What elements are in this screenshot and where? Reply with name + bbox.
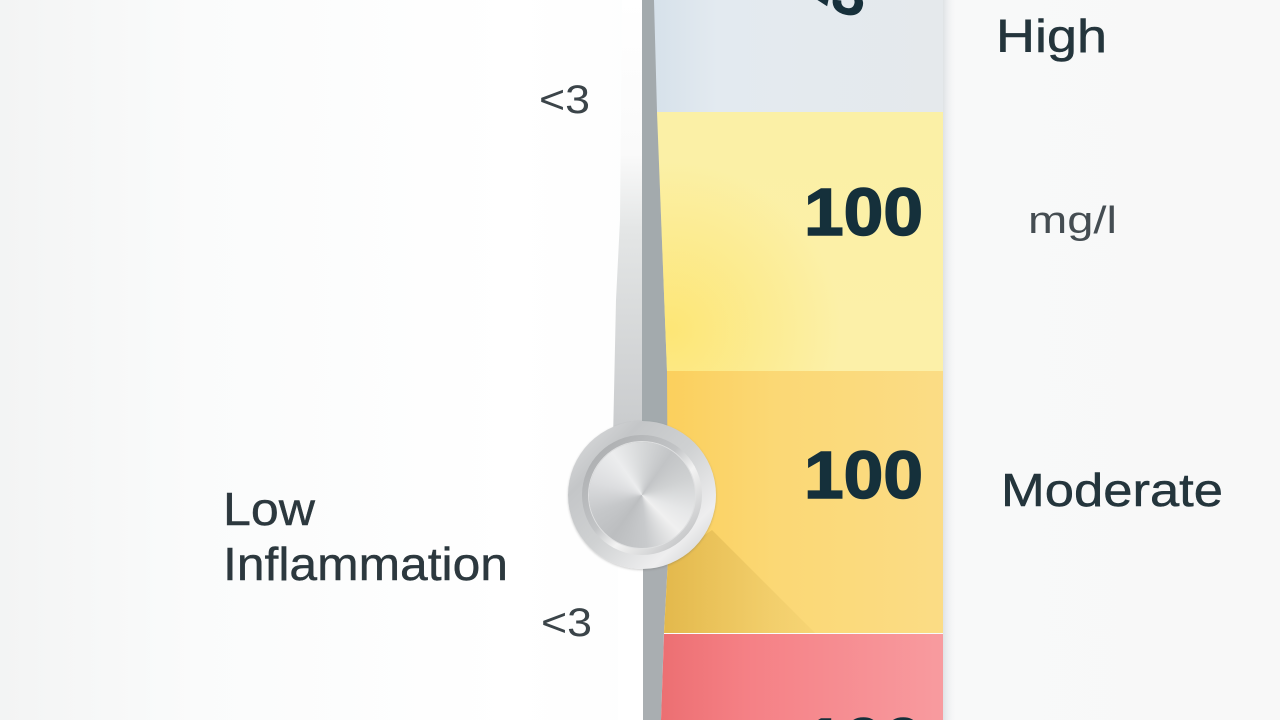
label: High: High [996, 10, 1107, 62]
dark rail [642, 0, 670, 440]
icon: metal slider knob [568, 421, 716, 569]
gauge band: low [661, 634, 943, 720]
label: lower less than 3: <3 [541, 601, 592, 645]
label: Low Inflammation: Low [223, 483, 316, 535]
gauge band: moderate [664, 371, 943, 633]
label: Low Inflammation [223, 483, 508, 590]
value: middle 100: 100 [804, 438, 923, 513]
value: upper 100: 100 [804, 175, 923, 250]
right edge shadow [943, 0, 957, 720]
label: upper less than 3: <3 [539, 78, 590, 122]
label: Moderate: Moderate [1001, 464, 1223, 516]
label: Low Inflammation: Inflammation [223, 538, 508, 590]
lower dark rail [643, 560, 668, 720]
label: unit: mg/l [1028, 200, 1117, 242]
knob cast shadow [664, 530, 815, 633]
white rail strip [618, 560, 643, 720]
gauge band: high [654, 0, 943, 112]
gauge band: elevated [657, 112, 943, 371]
silver rail highlight [613, 0, 643, 440]
